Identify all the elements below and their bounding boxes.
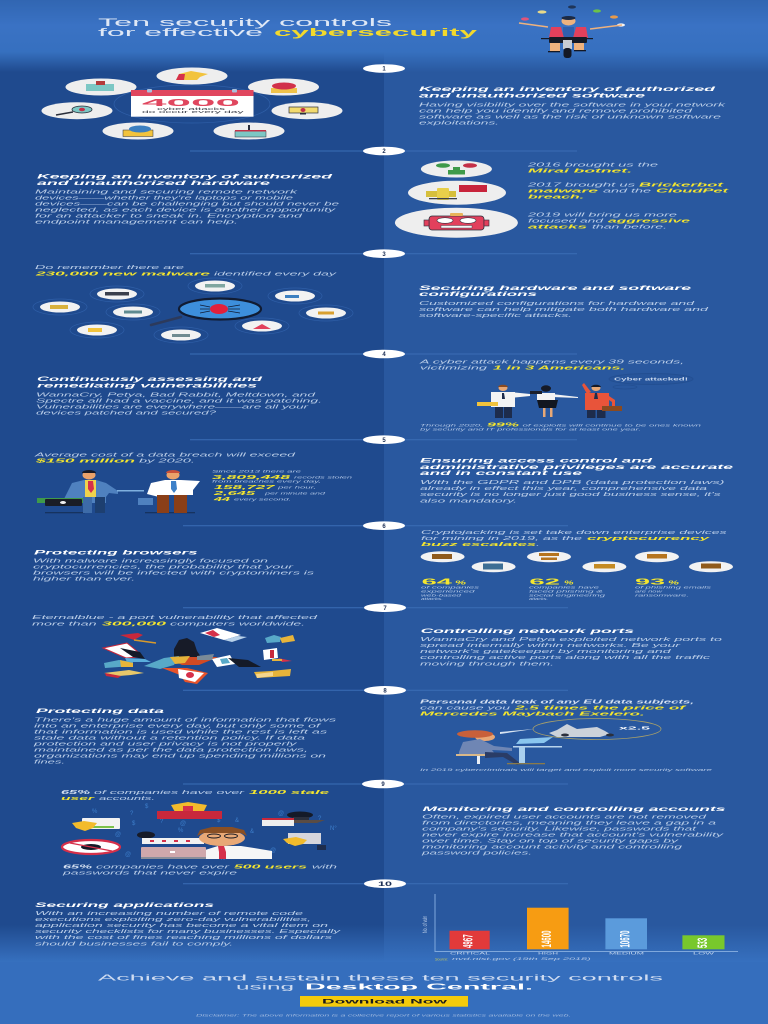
text block: control 9: never expire increase that account's vulnerability: [422, 833, 724, 839]
stat: 64 percent: experienced: [421, 589, 477, 593]
stat: 62 percent: 62: [529, 577, 562, 586]
text block: control 10: should businesses fail to comply.: [35, 941, 233, 947]
text block: control 10: application security has become a vital item on: [35, 923, 328, 929]
text block: control 4: devices patched and secured?: [36, 411, 216, 417]
text block: botnet timeline: [525, 163, 731, 231]
text block: botnet timeline: attacks: [528, 225, 587, 231]
bar: high: 14600: [539, 930, 555, 948]
text block: records stolen stats: from breaches every day,: [212, 480, 321, 484]
text block: control 2: and unauthorized hardware: [37, 180, 272, 187]
text block: control 2: Keeping an inventory of authorized: [37, 174, 333, 181]
text block: control 3: Customized configurations for hardware and: [419, 301, 697, 307]
stat: 64 percent: of companies: [421, 586, 480, 590]
text block: exploits note: by security and IT professionals for at least one year.: [420, 428, 641, 432]
illustration: account security analyst: @: [115, 832, 121, 838]
stat: 64 percent: web-based: [421, 593, 463, 597]
text block: control 2: endpoint management can help.: [35, 220, 238, 226]
text block: control 2: devices——whether they're laptops or mobile: [35, 196, 293, 202]
text block: GDPR fine comparison: 2.5 times the price of: [512, 705, 688, 711]
illustration: man at laptop imagining a car: x2.5: [619, 726, 652, 730]
text block: control 8: stale data without a retention policy. If data: [34, 735, 305, 741]
text block: control 8: protection and user privacy is not properly: [31, 742, 297, 748]
stat: 62 percent: attacks.: [529, 597, 548, 601]
illustration: account security analyst: @: [125, 852, 131, 858]
text block: control 7: WannaCry and Petya exploited network ports to: [420, 637, 722, 643]
panel: control 1 illustration, 4000 attacks: cyber attacks: [157, 107, 225, 111]
icon: juggler on unicycle: [519, 5, 625, 58]
text block: control 7: moving through them.: [420, 661, 554, 667]
text block: control 1: can help you identify and remove prohibited: [419, 109, 695, 115]
text block: eternalblue: Eternalblue - a port vulnerability that affected: [32, 615, 320, 621]
text block: control 10: With an increasing number of remote code: [35, 911, 303, 917]
title: [98, 17, 479, 39]
text block: cryptojacking: for mining in 2019, as the: [421, 536, 582, 542]
text block: control 7: network's gatekeeper by monitoring and: [420, 649, 673, 655]
text block: eternalblue: 300,000: [102, 621, 169, 627]
text block: cyber attack frequency: A cyber attack happens every 39 seconds,: [417, 359, 684, 365]
text block: control 2: devices——can be challenging but should never be: [35, 202, 339, 208]
text block: non expiring passwords: passwords that never expire: [60, 871, 237, 877]
text block: stale user accounts: user: [61, 796, 96, 802]
text block: records stolen stats: 44: [211, 497, 232, 503]
text block: non expiring passwords: 65%: [63, 864, 93, 870]
number badges: 6: [382, 524, 386, 530]
button: download now: [300, 996, 468, 1007]
text block: control 8: Protecting data: [36, 708, 166, 715]
text block: data breach cost: Average cost of a data breach will exceed: [32, 452, 298, 458]
footer call to action: Achieve and sustain these ten security controls: [98, 972, 663, 982]
text block: malware stat: [33, 265, 337, 277]
stat: 64 percent: [421, 577, 480, 601]
text block: GDPR fine comparison: Personal data leak of any EU data subjects,: [420, 699, 695, 705]
text block: control 9: from directories, meaning they leave a gap in a: [422, 820, 716, 826]
stat: 62 percent: faced phishing &: [529, 589, 605, 593]
text block: GDPR fine comparison: can cause you: [420, 705, 510, 711]
footer call to action: using: [236, 982, 295, 992]
text block: records stolen stats: records stolen: [294, 476, 352, 480]
text block: botnet timeline: breach.: [528, 195, 585, 201]
text block: control 7: Controlling network ports: [421, 628, 636, 635]
text block: control 9: password policies.: [419, 851, 532, 857]
text block: control 3: Securing hardware and software: [419, 285, 693, 292]
number badges: 5: [382, 438, 386, 444]
text block: control 2: [35, 174, 339, 226]
panel: control 1 illustration, 4000 attacks: [42, 68, 342, 140]
text block: cyber attack frequency: [417, 359, 684, 371]
text block: control 1: exploitations.: [419, 121, 499, 127]
text block: control 3: configurations: [419, 291, 539, 298]
text block: control 4: remediating vulnerabilities: [37, 383, 259, 390]
text block: data breach cost: by 2020.: [139, 459, 195, 465]
number badges: 8: [383, 688, 387, 694]
illustration: account security analyst: $: [217, 818, 221, 824]
stat: 62 percent: social engineering: [529, 593, 605, 597]
text block: exploits note: 99%: [487, 423, 519, 429]
icons: crypto threats: [421, 551, 733, 572]
text block: control 2: Maintaining and securing remote network: [35, 190, 298, 196]
text block: control 4: Continuously assessing and: [37, 376, 263, 383]
text block: control 4: Spectre all had a vaccine, and it was patching.: [36, 398, 322, 404]
disclaimer: Disclaimer: The above information is a collective report of various statistics available on the web.: [196, 1013, 571, 1017]
stat: 93 percent: %: [668, 581, 679, 587]
text block: records stolen stats: 2,645: [211, 491, 258, 497]
text block: control 10: [35, 902, 341, 947]
text block: control 10: with the cost of fines reaching millions of dollars: [35, 935, 333, 941]
text block: control 5: also mandatory.: [420, 498, 517, 504]
text block: control 10: Securing applications: [35, 902, 216, 909]
title: Ten security controls: [98, 17, 393, 29]
illustration: account security analyst: @: [270, 848, 276, 854]
bar: critical: 4967: [461, 934, 476, 948]
bar chart: vulnerabilities by severity: Source:: [435, 957, 448, 961]
text block: eternalblue: more than: [32, 621, 97, 627]
number badges: 9: [381, 782, 385, 788]
illustration: hacker and network attacks: [103, 628, 295, 684]
illustration: account security analyst: @: [112, 844, 118, 850]
text block: non expiring passwords: 500 users: [234, 864, 307, 870]
text block: botnet timeline: 2017 brought us: [525, 182, 636, 188]
text block: stale user accounts: of companies have over: [94, 790, 245, 796]
text block: control 9: over time. Stay on top of security gaps by: [422, 839, 679, 845]
bar chart: vulnerabilities by severity: [422, 894, 738, 961]
text block: control 8: into an enterprise every day, but only some of: [34, 723, 321, 729]
title: for effective: [98, 27, 263, 39]
illustration: account security analyst: [62, 802, 337, 862]
bar chart: vulnerabilities by severity: nvd.nist.gov (19th Sep 2018): [452, 957, 591, 961]
text block: records stolen stats: every second.: [234, 497, 291, 501]
text block: botnet timeline: and the: [603, 188, 651, 194]
text block: control 4: Vulnerabilities are everywhere——are all your: [36, 405, 309, 411]
text block: control 8: [31, 708, 337, 766]
bar: critical: [450, 931, 490, 949]
icons: botnet robots: [395, 160, 518, 238]
text block: stale user accounts: accounts.: [99, 796, 155, 802]
stat: 93 percent: ransomware.: [635, 593, 689, 597]
text block: control 6: browsers will be infected with cryptominers is: [33, 571, 315, 577]
text block: botnet timeline: aggressive: [608, 219, 690, 225]
text block: botnet timeline: Brickerbot: [639, 182, 726, 188]
text block: eternalblue: [32, 615, 320, 627]
stat: 62 percent: [529, 577, 605, 601]
text block: control 5: administrative privileges are accurate: [420, 464, 735, 471]
text block: GDPR fine comparison: [420, 699, 695, 717]
text block: control 10: executions exploiting zero-day vulnerabilities,: [35, 917, 311, 923]
text block: records stolen stats: per minute and: [262, 492, 327, 496]
number badges: 2: [382, 149, 386, 155]
text block: control 1: and unauthorized software: [419, 93, 647, 100]
text block: botnet timeline: than before.: [592, 225, 667, 231]
text block: non expiring passwords: [60, 864, 337, 877]
text block: control 1: [419, 86, 726, 127]
text block: data breach cost: $150 million: [33, 459, 137, 465]
panel: control 1 illustration, 4000 attacks: 4000: [142, 98, 242, 109]
stat: 93 percent: [635, 577, 711, 597]
text block: botnet timeline: Mirai botnet.: [528, 169, 633, 175]
text block: botnet timeline: CloudPet: [656, 188, 731, 194]
text block: malware stat: 230,000 new malware: [33, 271, 210, 277]
stat: 93 percent: are now: [635, 589, 663, 593]
text block: control 3: software can help mitigate both hardware and: [419, 307, 711, 313]
bar chart: vulnerabilities by severity: No. of vuln: [422, 916, 429, 933]
illustration: account security analyst: N°: [330, 826, 337, 832]
text block: control 10: security checklists for many businesses. Especially: [35, 929, 341, 935]
text block: control 6: With malware increasingly focused on: [33, 558, 268, 564]
bar: medium: [605, 918, 647, 949]
illustration: three office workers: [477, 374, 693, 418]
text block: botnet timeline: focused and: [528, 219, 606, 225]
text block: control 9: company's security. Likewise, passwords that: [422, 827, 697, 833]
illustration: account security analyst: ?: [160, 819, 164, 825]
text block: control 3: [419, 285, 711, 319]
text block: control 5: already in effect this year, comprehensive data: [420, 486, 707, 492]
bar: high: [527, 908, 569, 949]
text block: control 5: [420, 458, 735, 504]
illustration: account security analyst: &: [250, 829, 254, 835]
stat: 64 percent: 64: [422, 577, 454, 586]
number badges: 3: [382, 252, 386, 258]
illustration: account security analyst: %: [220, 856, 226, 862]
illustration: account security analyst: @: [278, 811, 284, 817]
number badges: 10: [378, 882, 393, 888]
text block: security software note: In 2019 cybercriminals will target and exploit more security software: [420, 768, 712, 772]
illustration: account security analyst: &: [235, 818, 239, 824]
text block: stale user accounts: [61, 790, 329, 802]
text block: records stolen stats: Since 2013 there are: [212, 469, 301, 473]
illustration: account security analyst: %: [92, 809, 98, 815]
text block: control 3: software-specific attacks.: [419, 313, 572, 319]
text block: cryptojacking: buzz escalates: [421, 542, 536, 548]
text block: control 6: higher than ever.: [33, 577, 135, 583]
number badges: 1: [382, 67, 386, 73]
text block: control 8: maintained as per the data protection laws,: [34, 748, 308, 754]
stat: 64 percent: attacks.: [421, 597, 443, 601]
footer call to action: Desktop Central.: [305, 982, 533, 992]
text block: eternalblue: computers worldwide.: [170, 621, 305, 627]
text block: botnet timeline: 2016 brought us the: [525, 163, 658, 169]
text block: control 8: There's a huge amount of information that flows: [34, 717, 337, 723]
stat: 64 percent: %: [455, 581, 466, 587]
text block: malware stat: Do remember there are: [35, 265, 184, 271]
text block: non expiring passwords: companies have over: [96, 864, 230, 870]
illustration: account security analyst: @: [180, 821, 186, 827]
text block: botnet timeline: 2019 will bring us more: [525, 212, 677, 218]
bar: medium: 10670: [618, 930, 633, 948]
bar chart: vulnerabilities by severity: HIGH: [538, 952, 559, 956]
text block: exploits note: of exploits will continue to be ones known: [522, 423, 701, 427]
illustration: account security analyst: $: [145, 804, 149, 810]
text block: control 5: and in constant use: [420, 470, 584, 477]
text block: control 1: software as well as the risk of unknown software: [419, 115, 721, 121]
text block: exploits note: Through 2020,: [420, 423, 483, 427]
text block: records stolen stats: [211, 470, 352, 503]
stat: 93 percent: of phishing emails: [635, 586, 711, 590]
stat: 62 percent: %: [564, 581, 574, 587]
text block: control 8: organizations may end up spending millions on: [34, 754, 326, 760]
text block: control 9: monitoring account activity and controlling: [422, 845, 682, 851]
text block: control 8: fines.: [34, 760, 65, 766]
panel: control 1 illustration, 4000 attacks: do occur every day: [142, 110, 244, 114]
text block: control 9: Monitoring and controlling accounts: [422, 806, 727, 813]
illustration: account security analyst: %: [178, 828, 184, 834]
illustration: man at laptop imagining a car: [456, 718, 661, 765]
text block: control 9: Often, expired user accounts are not removed: [422, 814, 709, 820]
illustration: three office workers: Cyber attacked!: [614, 376, 688, 382]
text block: cryptojacking: .: [536, 542, 540, 548]
text block: control 6: cryptocurrencies, the probability that your: [33, 564, 294, 570]
text block: control 2: neglected, as each device is another opportunity: [35, 208, 336, 214]
text block: stale user accounts: 65%: [61, 790, 91, 796]
illustration: businessmen exchanging briefcase: [37, 470, 200, 513]
text block: control 6: Protecting browsers: [34, 550, 199, 557]
text block: control 6: [33, 550, 315, 583]
text block: data breach cost: [32, 452, 298, 465]
icon: magnifier with malware: [33, 278, 353, 343]
bar: low: [682, 935, 724, 949]
stat: 93 percent: 93: [635, 577, 667, 586]
text block: control 7: spread internally within networks. Be your: [420, 643, 681, 649]
text block: control 1: Having visibility over the software in your network: [419, 103, 726, 109]
text block: exploits note: [420, 423, 701, 432]
text block: records stolen stats: 3,809,448: [212, 475, 293, 481]
button: download now: Download Now: [322, 998, 449, 1005]
text block: malware stat: identified every day: [214, 271, 337, 277]
text block: cyber attack frequency: 1 in 3 Americans.: [493, 365, 626, 371]
text block: botnet timeline: malware: [528, 188, 598, 194]
bar: low: 533: [695, 938, 711, 948]
text block: control 7: controlling active ports along with all the traffic: [420, 655, 711, 661]
text block: cyber attack frequency: victimizing: [420, 365, 487, 371]
text block: control 9: [419, 806, 727, 857]
text block: control 7: [420, 628, 722, 667]
text block: cryptojacking: cryptocurrency: [587, 536, 712, 542]
text block: non expiring passwords: with: [312, 864, 337, 870]
stat: 62 percent: companies have: [529, 586, 599, 590]
text block: control 5: security is no longer just good business sense, it's: [420, 492, 721, 498]
bar chart: vulnerabilities by severity: MEDIUM: [609, 952, 644, 956]
text block: control 4: [36, 376, 322, 417]
illustration: account security analyst: $: [132, 821, 136, 827]
bar chart: vulnerabilities by severity: CRITICAL: [450, 952, 490, 956]
bar chart: vulnerabilities by severity: LOW: [693, 952, 716, 956]
number badges: 4: [382, 352, 386, 358]
number badges: 7: [383, 606, 387, 612]
text block: control 5: Ensuring access control and: [420, 458, 653, 465]
text block: cryptojacking: [421, 530, 727, 548]
illustration: account security analyst: ?: [130, 811, 134, 817]
text block: GDPR fine comparison: Mercedes Maybach Exelero.: [420, 711, 646, 717]
text block: control 4: WannaCry, Petya, Bad Rabbit, Meltdown, and: [36, 392, 318, 398]
text block: control 2: for an attacker to sneak in. Encryption and: [35, 214, 305, 220]
text block: records stolen stats: per hour,: [275, 485, 316, 489]
illustration: account security analyst: @: [250, 854, 256, 860]
illustration: account security analyst: ?: [318, 816, 322, 822]
text block: records stolen stats: 158,727: [214, 485, 277, 491]
title: cybersecurity: [274, 27, 479, 39]
divider lines: [183, 151, 577, 884]
text block: stale user accounts: 1000 stale: [249, 790, 329, 796]
text block: control 5: With the GDPR and DPB (data protection laws): [420, 480, 725, 486]
footer call to action: [98, 972, 663, 992]
text block: cryptojacking: Cryptojacking is set take down enterprise devices: [421, 530, 727, 536]
number badges: [362, 64, 406, 888]
text block: control 8: that information is used while the rest is left as: [34, 729, 328, 735]
text block: control 1: Keeping an inventory of authorized: [419, 86, 716, 93]
